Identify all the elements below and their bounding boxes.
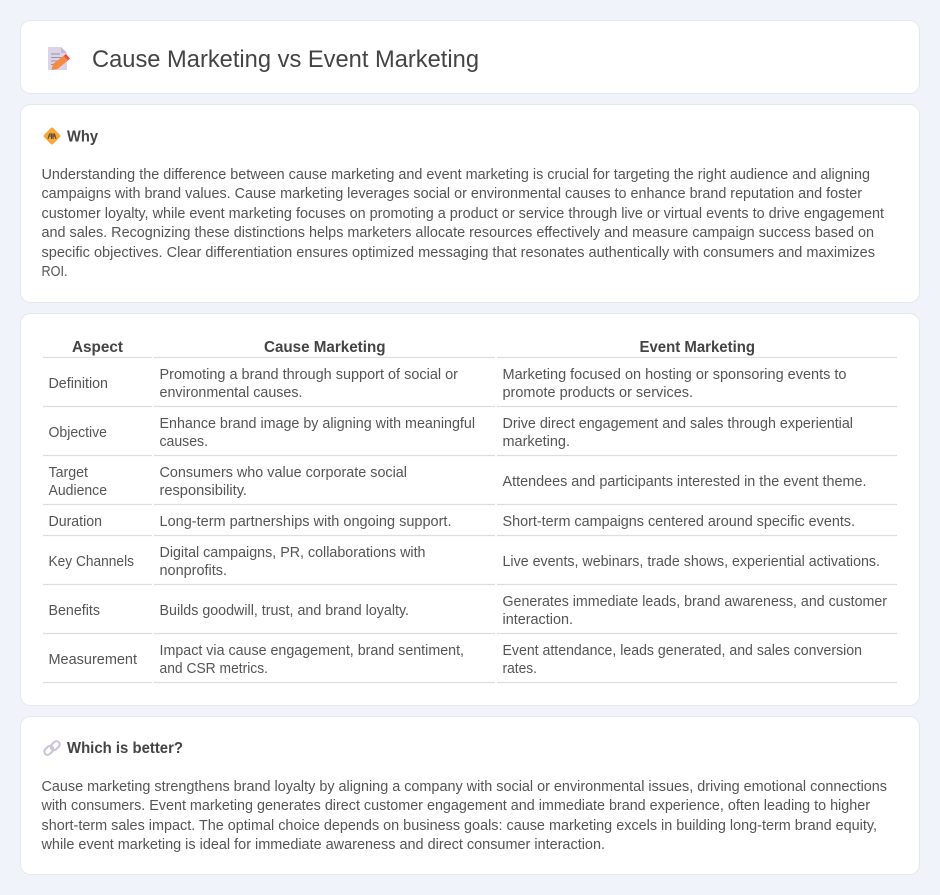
row: objective: causes. bbox=[160, 434, 208, 450]
row: key channels: Live events, webinars, trade shows, experiential activations. bbox=[502, 554, 880, 570]
table header row: Aspect bbox=[72, 339, 124, 356]
row: duration: Short-term campaigns centered around specific events. bbox=[502, 514, 855, 530]
panel: why bbox=[20, 104, 920, 302]
row: measurement: rates. bbox=[502, 661, 537, 677]
row: measurement bbox=[48, 643, 862, 677]
row: measurement: Measurement bbox=[48, 652, 137, 668]
row: duration bbox=[48, 514, 855, 530]
row: definition bbox=[48, 367, 846, 401]
panel: comparison table bbox=[20, 314, 920, 706]
table header row: Event Marketing bbox=[640, 339, 755, 356]
row: definition: Definition bbox=[48, 376, 108, 392]
icon: warning diamond bbox=[43, 127, 61, 145]
row: objective: marketing. bbox=[502, 434, 570, 450]
row: measurement: Event attendance, leads generated, and sales conversion bbox=[502, 643, 862, 659]
heading: which is better: Which is better? bbox=[67, 740, 183, 757]
text block: why paragraph: ROI. bbox=[42, 264, 68, 280]
row: duration: Duration bbox=[48, 514, 102, 530]
icon: chain link bbox=[43, 740, 61, 756]
text block: which is better paragraph bbox=[40, 779, 887, 853]
row: benefits bbox=[48, 594, 887, 628]
row: benefits: Benefits bbox=[48, 603, 100, 619]
row: objective: Drive direct engagement and sales through experiential bbox=[502, 416, 853, 432]
title: Cause Marketing vs Event Marketing bbox=[92, 46, 479, 73]
table header row bbox=[72, 339, 755, 356]
panel: title header bbox=[20, 20, 920, 94]
row: key channels: nonprofits. bbox=[160, 563, 227, 579]
row: target audience: Attendees and participants interested in the event theme. bbox=[502, 474, 866, 490]
row: target audience bbox=[48, 465, 866, 499]
row: target audience: responsibility. bbox=[160, 483, 247, 499]
text block: why paragraph bbox=[42, 167, 884, 280]
row: objective: Enhance brand image by aligning with meaningful bbox=[160, 416, 475, 432]
text block: which is better paragraph: Cause marketing strengthens brand loyalty by aligning a company with social or environmental issues, driving emotional connections bbox=[42, 779, 887, 795]
heading: why: Why bbox=[67, 128, 98, 146]
text block: why paragraph: campaigns with brand values. Cause marketing leverages social or environmental causes to enhance brand reputation and foster bbox=[42, 186, 862, 202]
row: key channels: Key Channels bbox=[48, 554, 134, 570]
text block: why paragraph: customer loyalty, while event marketing focuses on promoting a product or service through live or virtual events to drive engagement bbox=[42, 206, 884, 222]
row: objective: Objective bbox=[48, 425, 107, 441]
text block: why paragraph: and sales. Recognizing these distinctions helps marketers allocate resources effectively and measure campaign success based on bbox=[42, 225, 874, 241]
row: definition: promote products or services. bbox=[502, 385, 693, 401]
row: target audience: Consumers who value corporate social bbox=[160, 465, 407, 481]
row: objective bbox=[48, 416, 853, 450]
row: key channels bbox=[48, 545, 880, 579]
row: definition: Promoting a brand through support of social or bbox=[160, 367, 458, 383]
text block: which is better paragraph: while event marketing is ideal for immediate awareness and direct consumer interaction. bbox=[40, 837, 605, 853]
row: definition: Marketing focused on hosting or sponsoring events to bbox=[502, 367, 846, 383]
row: measurement: and CSR metrics. bbox=[160, 661, 268, 677]
row: target audience: Audience bbox=[48, 483, 107, 499]
icon: memo with pencil bbox=[48, 47, 70, 70]
panel: which is better bbox=[20, 716, 920, 874]
text block: which is better paragraph: with consumers. Event marketing generates direct customer engagement and immediate brand experience, often leading to higher bbox=[41, 798, 870, 814]
table header row: Cause Marketing bbox=[264, 339, 386, 356]
row: benefits: Builds goodwill, trust, and brand loyalty. bbox=[160, 603, 409, 619]
text block: why paragraph: Understanding the difference between cause marketing and event marketing is crucial for targeting the right audience and aligning bbox=[42, 167, 870, 183]
row: definition: environmental causes. bbox=[160, 385, 302, 401]
text block: why paragraph: specific objectives. Clear differentiation ensures optimized messaging that resonates authentically with consumers and maximizes bbox=[42, 245, 875, 261]
row: measurement: Impact via cause engagement, brand sentiment, bbox=[160, 643, 464, 659]
row: key channels: Digital campaigns, PR, collaborations with bbox=[160, 545, 426, 561]
row: benefits: Generates immediate leads, brand awareness, and customer bbox=[502, 594, 887, 610]
row: target audience: Target bbox=[48, 465, 88, 481]
text block: which is better paragraph: short-term sales impact. The optimal choice depends on business goals: cause marketing excels in building long-term brand equity, bbox=[42, 818, 877, 834]
row: benefits: interaction. bbox=[502, 612, 573, 628]
row: duration: Long-term partnerships with ongoing support. bbox=[160, 514, 452, 530]
